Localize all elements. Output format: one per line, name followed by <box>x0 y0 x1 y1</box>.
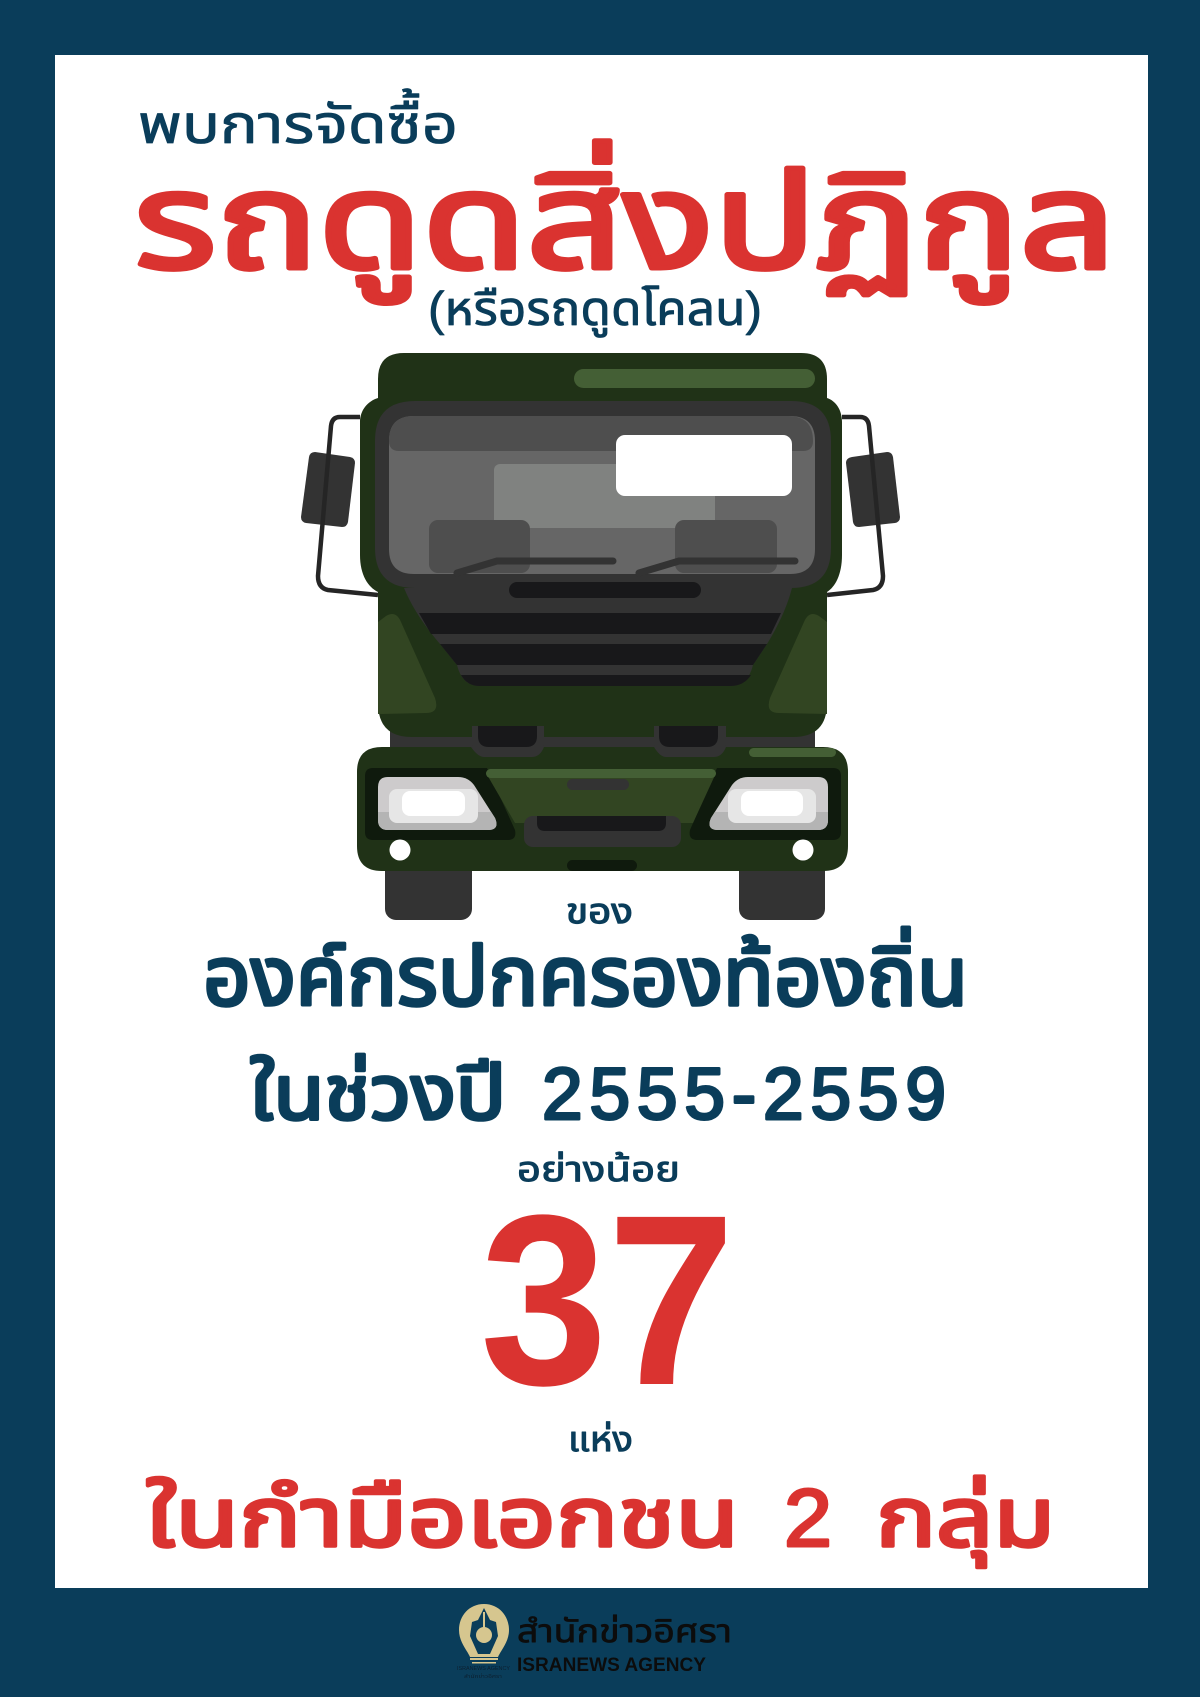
heading: year range <box>250 1051 946 1136</box>
logo emblem: สำนักข่าวอิศรา <box>464 1673 502 1680</box>
heading: year range: ในช่วงปี <box>250 1051 506 1136</box>
illustration: truck front view <box>301 353 900 920</box>
bumper centre strip <box>486 769 716 778</box>
vent pod left inner <box>478 726 537 747</box>
logo Thai name: สำนักข่าวอิศรา <box>517 1613 732 1649</box>
bumper <box>357 747 848 871</box>
logo emblem: ISRANEWS AGENCY <box>457 1666 511 1672</box>
label: at least: อย่างน้อย <box>517 1150 680 1189</box>
bumper vent <box>524 816 681 847</box>
windshield glass <box>389 416 815 574</box>
closing line: กลุ่ม <box>876 1473 1055 1568</box>
sun visor <box>389 416 813 451</box>
closing line <box>146 1473 1055 1568</box>
footer logo <box>457 1604 732 1680</box>
wiper right <box>639 561 795 573</box>
grille stripe 1 <box>419 613 781 634</box>
closing line: 2 <box>784 1473 832 1564</box>
wheel right <box>739 850 825 920</box>
vent pod right <box>654 726 726 757</box>
white label box <box>616 435 792 496</box>
bumper bottom slot <box>567 860 637 871</box>
bumper highlight <box>749 748 836 757</box>
windshield frame <box>375 401 831 588</box>
headlight housing right <box>690 768 841 840</box>
grille surround <box>404 588 792 686</box>
mirror right <box>846 452 900 527</box>
seat right <box>675 520 777 573</box>
logo emblem <box>457 1604 511 1680</box>
mirror left <box>301 452 355 527</box>
fog light left <box>390 840 410 860</box>
subtitle: (หรือรถดูดโคลน) <box>428 282 762 337</box>
bumper centre panel <box>486 773 716 823</box>
heading: year range: 2555-2559 <box>542 1054 946 1135</box>
label: of: ของ <box>566 892 633 931</box>
roof light strip <box>574 369 815 388</box>
fog light right <box>792 840 814 860</box>
side panel left <box>378 614 436 714</box>
big number: 37 <box>480 1165 735 1436</box>
bumper vent inner <box>537 816 666 831</box>
title: main heading: รถดูดสิ่งปฏิกูล <box>134 140 1116 304</box>
wiper left <box>457 561 613 573</box>
heading: local government: องค์กรปกครองท้องถิ่น <box>203 927 968 1023</box>
side panel right <box>769 614 827 714</box>
vent pod right inner <box>659 726 718 747</box>
mirror arm right <box>827 417 883 595</box>
headlamp right <box>706 777 828 830</box>
grille stripe 3 <box>461 675 751 686</box>
headlight housing left <box>365 768 515 840</box>
interior panel <box>494 464 715 528</box>
closing line: ในกำมือเอกชน <box>146 1473 739 1564</box>
label: places: แห่ง <box>568 1420 633 1459</box>
chassis bar <box>390 720 815 760</box>
headlamp left <box>378 777 500 830</box>
title: intro line: พบการจัดซื้อ <box>138 88 458 155</box>
seat left <box>429 520 530 573</box>
mirror arm left <box>318 417 378 595</box>
vent pod left <box>472 726 544 757</box>
pill below windshield <box>509 582 701 598</box>
logo English name: ISRANEWS AGENCY <box>517 1655 706 1676</box>
cab upper <box>360 353 842 737</box>
grille stripe 2 <box>440 644 767 665</box>
wheel left <box>385 850 472 920</box>
bumper small slot <box>567 779 629 790</box>
